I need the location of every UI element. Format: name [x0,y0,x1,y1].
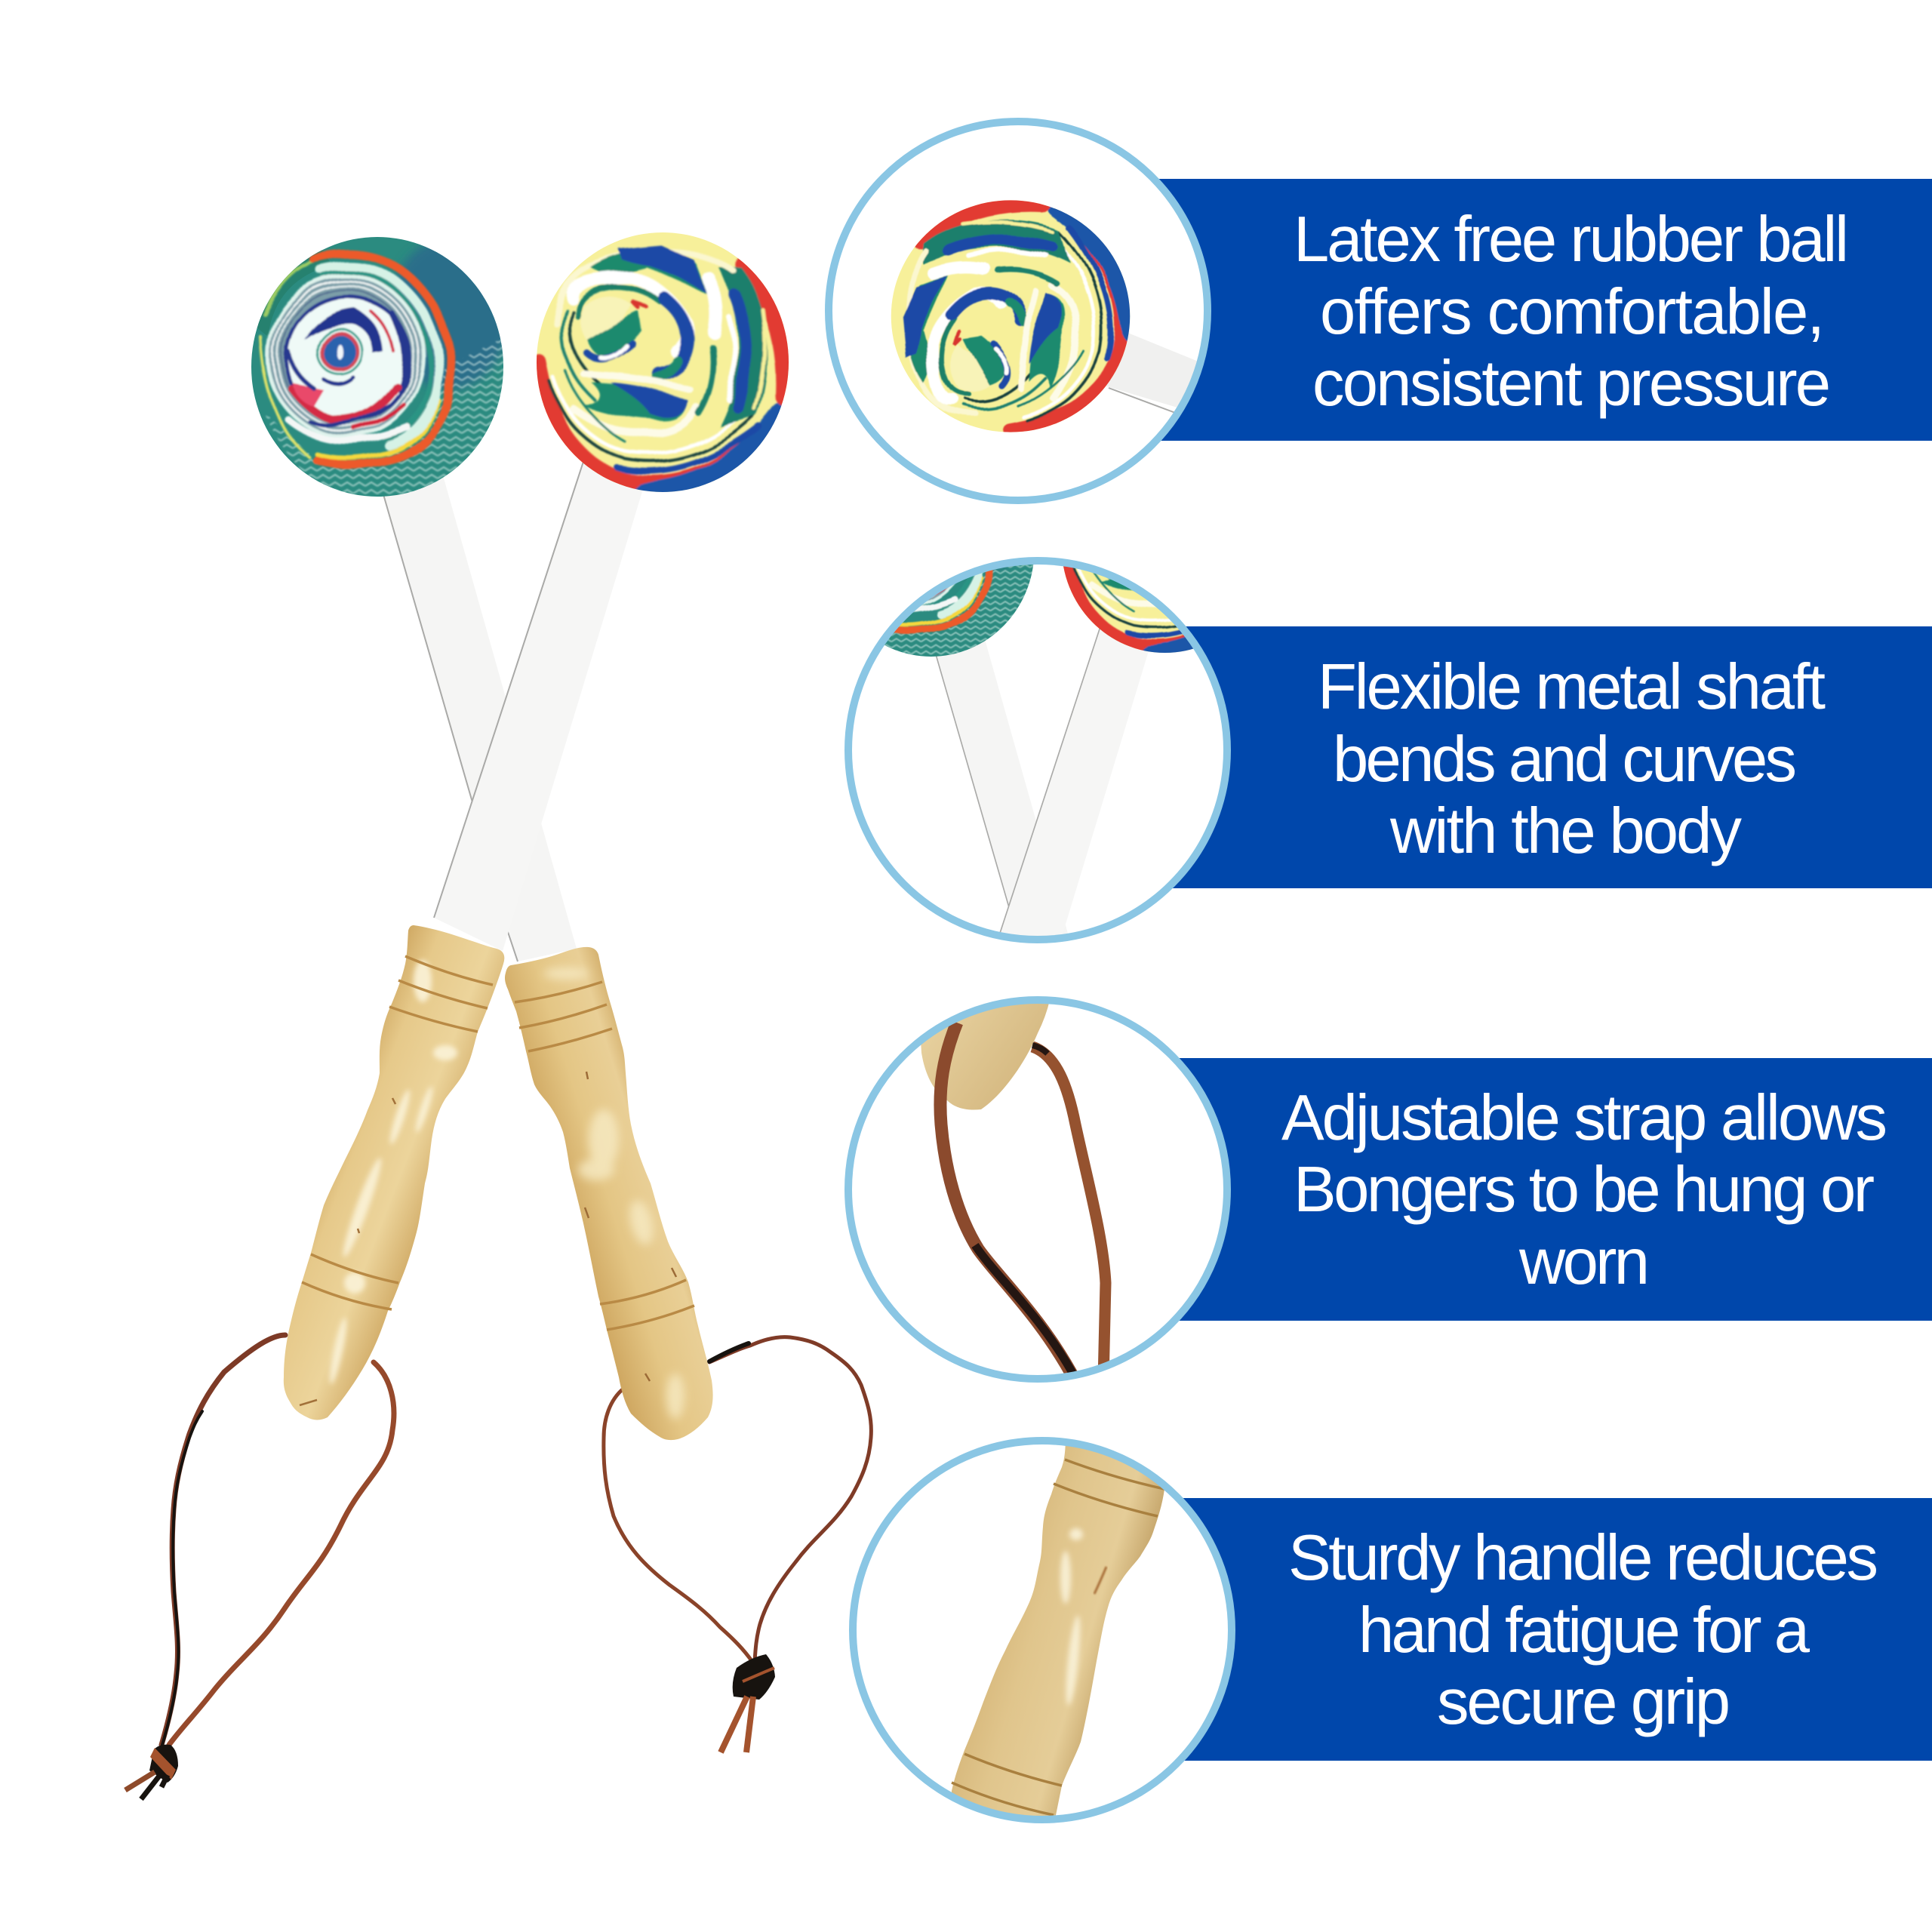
banner 4 [1155,1498,1932,1761]
right wooden handle [505,947,713,1440]
handle highlights [543,968,685,1419]
right shaft [434,429,656,951]
left strap knot [125,1745,178,1799]
banner 4 text: secure grip [1437,1666,1730,1738]
banner 2 text: bends and curves [1333,724,1797,795]
banner 1 text: offers comfortable, [1320,276,1825,348]
feature row 3: strap [848,981,1932,1381]
banner 2 text: Flexible metal shaft [1318,651,1826,723]
feature row 1: rubber ball [829,122,1932,500]
banner 4 text: hand fatigue for a [1358,1595,1810,1666]
left strap [162,1335,394,1745]
inset circle 4: handle close-up [853,1434,1232,1826]
right swirl ball [527,226,798,498]
banner 1 [1155,179,1932,441]
banner 3 [1155,1058,1932,1321]
left wooden handle [284,925,504,1420]
banner 3 text: Bongers to be hung or [1294,1154,1875,1226]
banner 4 text [1288,1522,1878,1738]
product photo: pair of bongers [125,226,871,1799]
inset circle 1: ball close-up [829,122,1208,500]
feature row 2: metal shaft [844,557,1932,943]
banner 3 text: Adjustable strap allows [1281,1082,1887,1154]
right strap knot [721,1654,775,1752]
banner 1 text [1294,204,1849,420]
banner 1 text: Latex free rubber ball [1294,204,1849,275]
banner 2 text [1318,651,1826,867]
banner 2 text: with the body [1389,795,1742,867]
inset circle 3: strap close-up [848,981,1227,1381]
inset circle 2: shaft close-up [844,557,1231,943]
banner 1 text: consistent pressure [1312,348,1831,420]
handle highlights [327,960,457,1385]
left shaft [371,441,577,961]
banner 4 text: Sturdy handle reduces [1288,1522,1878,1594]
banner 2 [1155,626,1932,888]
left swirl ball [242,231,513,503]
banner 3 text: worn [1518,1226,1650,1298]
feature row 4: handle [853,1434,1932,1826]
banner 3 text [1281,1082,1887,1298]
right strap [604,1337,871,1662]
